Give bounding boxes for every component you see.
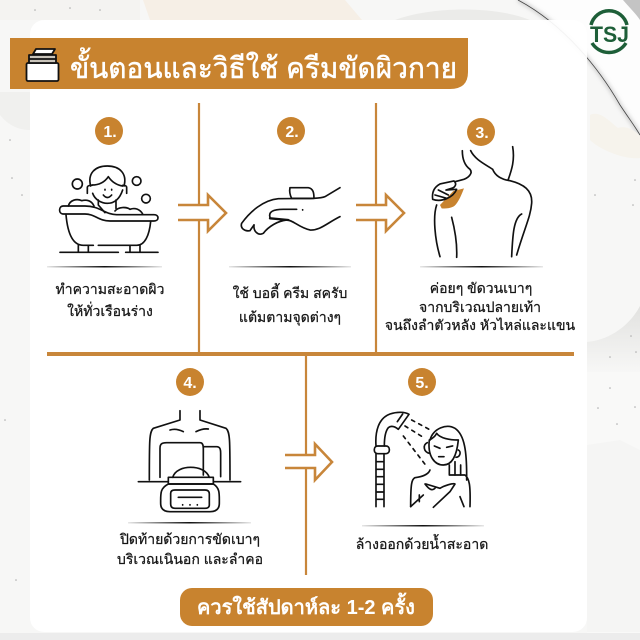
rule: [128, 522, 251, 524]
text 1: ให้ทั่วเรือนร่าง: [67, 302, 153, 319]
rule: [420, 266, 543, 268]
icon: cream jar and chest: [138, 411, 241, 512]
badge 3: 3.: [475, 125, 489, 142]
badge 2: 2.: [285, 124, 299, 141]
arrow 1: [178, 195, 226, 231]
badge 4: 4.: [183, 375, 197, 392]
rule: [362, 525, 484, 526]
text 3: ค่อยๆ ขัดวนเบาๆ: [430, 280, 532, 296]
badge 1: 1.: [103, 124, 117, 141]
rule: [229, 266, 351, 268]
rule: [47, 266, 162, 268]
step 4: [117, 368, 263, 567]
text 5: ล้างออกด้วยน้ำสะอาด: [356, 534, 488, 552]
text 3: จากบริเวณปลายเท้า: [419, 299, 541, 315]
text 4: ปิดท้ายด้วยการขัดเบาๆ: [120, 531, 260, 547]
brand logo: TSJ: [590, 22, 629, 47]
icon: shower: [374, 412, 470, 507]
badge 4: [176, 368, 204, 396]
step 3: [385, 118, 576, 333]
step 1: [47, 117, 164, 319]
icon: hand with cream: [241, 188, 340, 234]
step 2: [229, 117, 351, 326]
title text: ขั้นตอนและวิธีใช้ ครีมขัดผิวกาย: [70, 47, 457, 85]
divider lines: [47, 103, 574, 575]
text 1: ทำความสะอาดผิว: [56, 281, 164, 297]
brand logo: [590, 11, 629, 52]
icon: bath: [60, 166, 158, 252]
badge 3: [467, 118, 495, 146]
badge 5: 5.: [415, 375, 429, 392]
badge 2: [277, 117, 305, 145]
arrow 3: [285, 444, 332, 480]
text 3: จนถึงลำตัวหลัง หัวไหล่และแขน: [385, 317, 576, 333]
arrow 2: [356, 195, 404, 231]
text 2: แต้มตามจุดต่างๆ: [239, 309, 341, 326]
icon: shoulder scrub: [432, 147, 532, 257]
frequency callout: [180, 588, 433, 626]
step 5: [356, 368, 488, 552]
badge 5: [408, 368, 436, 396]
text 4: บริเวณเนินอก และลำคอ: [117, 551, 263, 567]
frequency callout: ควรใช้สัปดาห์ละ 1-2 ครั้ง: [197, 592, 415, 619]
icon: cream jar: [26, 49, 58, 81]
badge 1: [95, 117, 123, 145]
title banner: [10, 38, 468, 89]
text 2: ใช้ บอดี้ ครีม สครับ: [233, 283, 347, 301]
